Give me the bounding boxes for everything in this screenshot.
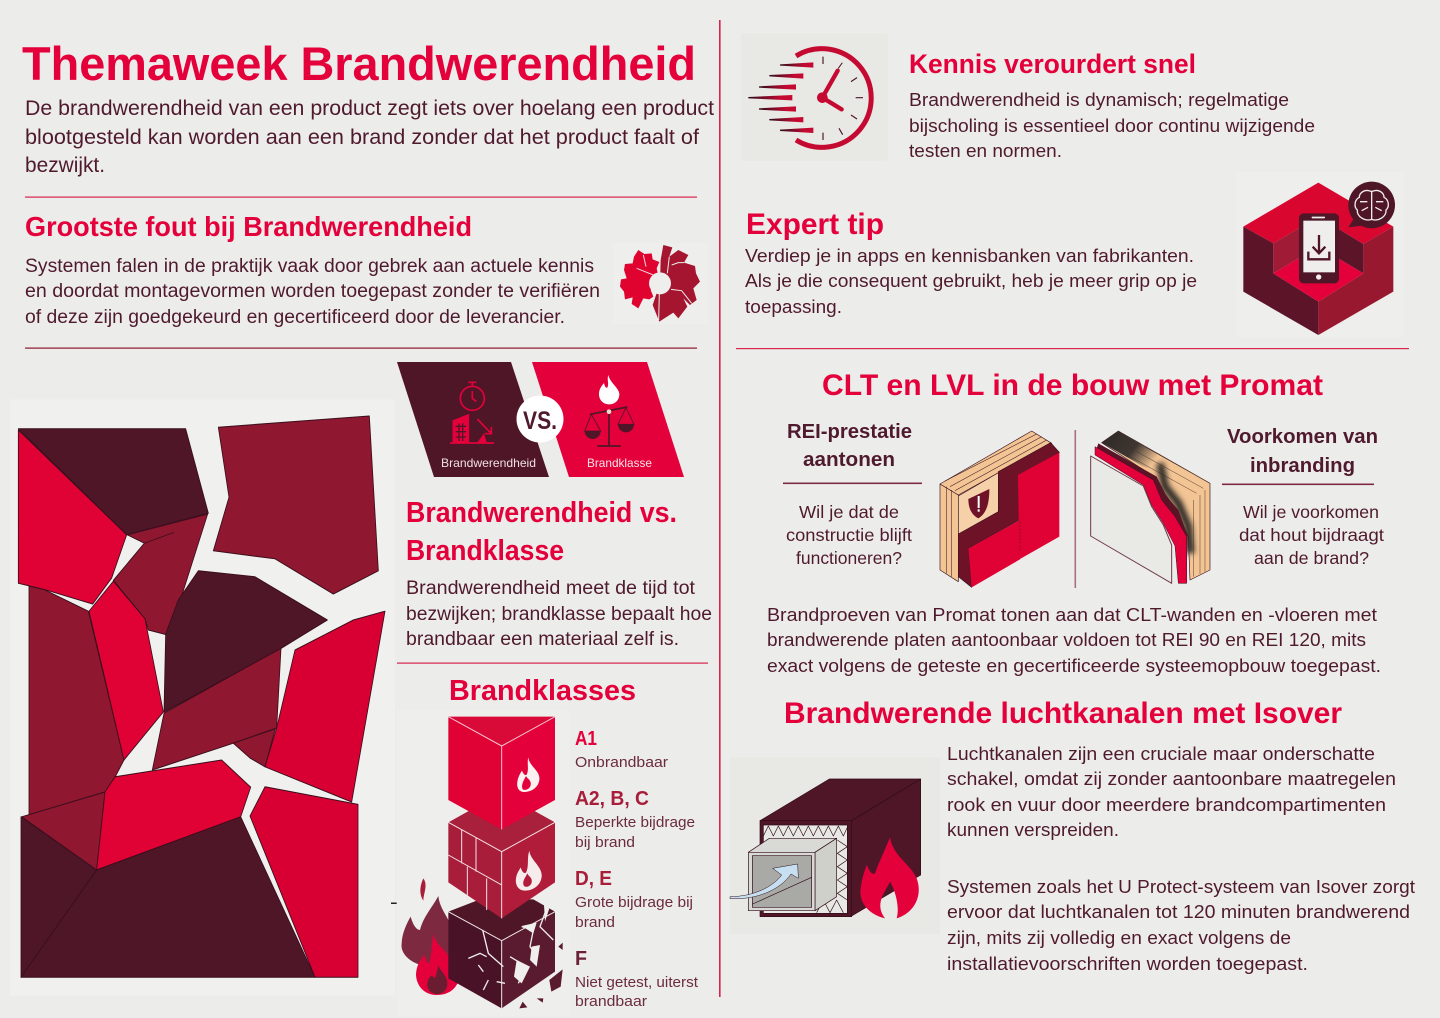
text: expert tip (745, 245, 1197, 317)
text: kennis: bijscholing is essentieel door continu wijzigende (909, 115, 1315, 136)
column: rei-prestatie: constructie blijft (786, 525, 912, 545)
legend: F: F (575, 948, 587, 970)
legend: A2 B C: Beperkte bijdrage (575, 815, 695, 831)
text: luchtkanalen paragraph 2: zijn, mits zij volledig en exact volgens de (947, 927, 1291, 948)
illustration: charred clt wall (1091, 431, 1210, 583)
legend: A2 B C (575, 788, 695, 851)
top block: A1 (448, 717, 555, 829)
text: expert tip: Verdiep je in apps en kennisbanken van fabrikanten. (745, 245, 1194, 266)
legend: D E: D, E (575, 868, 612, 890)
panel: vs comparison: Brandwerendheid (441, 456, 536, 470)
legend: D E (575, 868, 693, 931)
column: voorkomen van inbranding: Voorkomen van (1227, 426, 1378, 448)
column: rei-prestatie (783, 421, 922, 568)
text: kennis (909, 89, 1315, 161)
legend: A2 B C: A2, B, C (575, 788, 649, 810)
text: vs explanation: brandbaar een materiaal zelf is. (406, 629, 679, 650)
text: vs explanation (406, 578, 712, 650)
panel: vs comparison (397, 362, 684, 477)
text: luchtkanalen paragraph 2 (947, 876, 1415, 974)
text: luchtkanalen paragraph 1: kunnen verspreiden. (947, 819, 1119, 840)
legend: D E: Grote bijdrage bij (575, 895, 693, 911)
icon: speeding clock (741, 33, 888, 161)
illustration: block tower (397, 710, 570, 1016)
heading: grootste fout: Grootste fout bij Brandwerendheid (25, 211, 472, 242)
icon: background flames (401, 878, 461, 995)
text: promat paragraph (767, 604, 1381, 676)
text: expert tip: Als je die consequent gebruikt, heb je meer grip op je (745, 270, 1197, 291)
text: luchtkanalen paragraph 1: Luchtkanalen zijn een cruciale maar onderschatte (947, 743, 1375, 764)
illustration: cracked shards (10, 400, 395, 996)
heading: brandwerendheid vs brandklasse (406, 497, 677, 567)
heading: brandklasses: Brandklasses (449, 675, 636, 707)
column: rei-prestatie: REI-prestatie (787, 421, 912, 443)
heading: expert tip: Expert tip (746, 208, 884, 241)
legend: D E: brand (575, 915, 615, 931)
text: vs explanation: Brandwerendheid meet de tijd tot (406, 578, 696, 599)
text: luchtkanalen paragraph 1: schakel, omdat zij zonder aantoonbare maatregelen (947, 768, 1396, 789)
column: rei-prestatie: Wil je dat de (799, 502, 899, 522)
column: voorkomen van inbranding: Wil je voorkomen (1243, 502, 1379, 522)
vs badge (516, 396, 564, 442)
heading: clt en lvl: CLT en LVL in de bouw met Promat (822, 369, 1323, 402)
legend: A2 B C: bij brand (575, 835, 635, 851)
legend: A1: Onbrandbaar (575, 755, 668, 771)
text: kennis: testen en normen. (909, 140, 1062, 161)
column: voorkomen van inbranding: dat hout bijdraagt (1239, 525, 1384, 545)
legend: A1 (575, 728, 668, 771)
column: voorkomen van inbranding (1222, 426, 1384, 568)
column: rei-prestatie: aantonen (803, 449, 895, 471)
heading: brandwerendheid vs brandklasse: Brandwerendheid vs. (406, 497, 677, 529)
middle block: A2 B C (448, 793, 555, 918)
icon: stopwatch and collapsing building (450, 382, 494, 443)
text: promat paragraph: exact volgens de geteste en gecertificeerde systeemopbouw toegepast. (767, 655, 1381, 676)
legend: F: brandbaar (575, 994, 647, 1010)
illustration: clt wall with panels (940, 431, 1059, 587)
intro text block: De brandwerendheid van een product zegt iets over hoelang een product (25, 97, 714, 120)
heading: luchtkanalen: Brandwerende luchtkanalen met Isover (784, 697, 1342, 730)
legend: A1: A1 (575, 728, 597, 750)
text: promat paragraph: brandwerende platen aantoonbaar voldoen tot REI 90 en REI 120, mits (767, 629, 1366, 650)
column: voorkomen van inbranding: inbranding (1250, 455, 1355, 477)
text: kennis: Brandwerendheid is dynamisch; regelmatige (909, 89, 1289, 110)
legend: F: Niet getest, uiterst (575, 975, 698, 991)
text: vs explanation: bezwijken; brandklasse bepaalt hoe (406, 604, 712, 625)
intro text block (25, 97, 714, 177)
text: luchtkanalen paragraph 2: installatievoorschriften worden toegepast. (947, 953, 1308, 974)
text: grootste fout: en doordat montagevormen worden toegepast zonder te verifiëren (25, 281, 600, 302)
text: luchtkanalen paragraph 1 (947, 743, 1396, 840)
vs badge: VS. (523, 407, 557, 435)
text: grootste fout: of deze zijn goedgekeurd en gecertificeerd door de leverancier. (25, 307, 565, 328)
icon: phone cube and brain (1236, 172, 1404, 337)
column: rei-prestatie: functioneren? (796, 548, 902, 568)
text: luchtkanalen paragraph 1: rook en vuur door meerdere brandcompartimenten (947, 794, 1386, 815)
title: Themaweek Brandwerendheid (22, 37, 696, 90)
heading: kennis verourdert snel: Kennis verourdert snel (909, 49, 1196, 79)
legend: F (575, 948, 698, 1010)
text: promat paragraph: Brandproeven van Promat tonen aan dat CLT-wanden en -vloeren met (767, 604, 1377, 625)
text: grootste fout (25, 256, 600, 328)
text: luchtkanalen paragraph 2: Systemen zoals het U Protect-systeem van Isover zorgt (947, 876, 1415, 897)
bottom block: F (448, 899, 563, 1008)
text: grootste fout: Systemen falen in de praktijk vaak door gebrek aan actuele kennis (25, 256, 594, 277)
heading: brandwerendheid vs brandklasse: Brandklasse (406, 535, 564, 567)
panel: vs comparison: Brandklasse (587, 456, 652, 470)
illustration: insulated duct with flame (730, 757, 940, 934)
icon: flame and scales (585, 375, 634, 446)
intro text block: blootgesteld kan worden aan een brand zonder dat het product faalt of (25, 126, 699, 149)
column: voorkomen van inbranding: aan de brand? (1254, 548, 1369, 568)
text: expert tip: toepassing. (745, 296, 842, 317)
intro text block: bezwijkt. (25, 154, 105, 177)
text: luchtkanalen paragraph 2: ervoor dat luchtkanalen tot 120 minuten brandwerend (947, 901, 1410, 922)
icon: broken cog (613, 243, 708, 324)
